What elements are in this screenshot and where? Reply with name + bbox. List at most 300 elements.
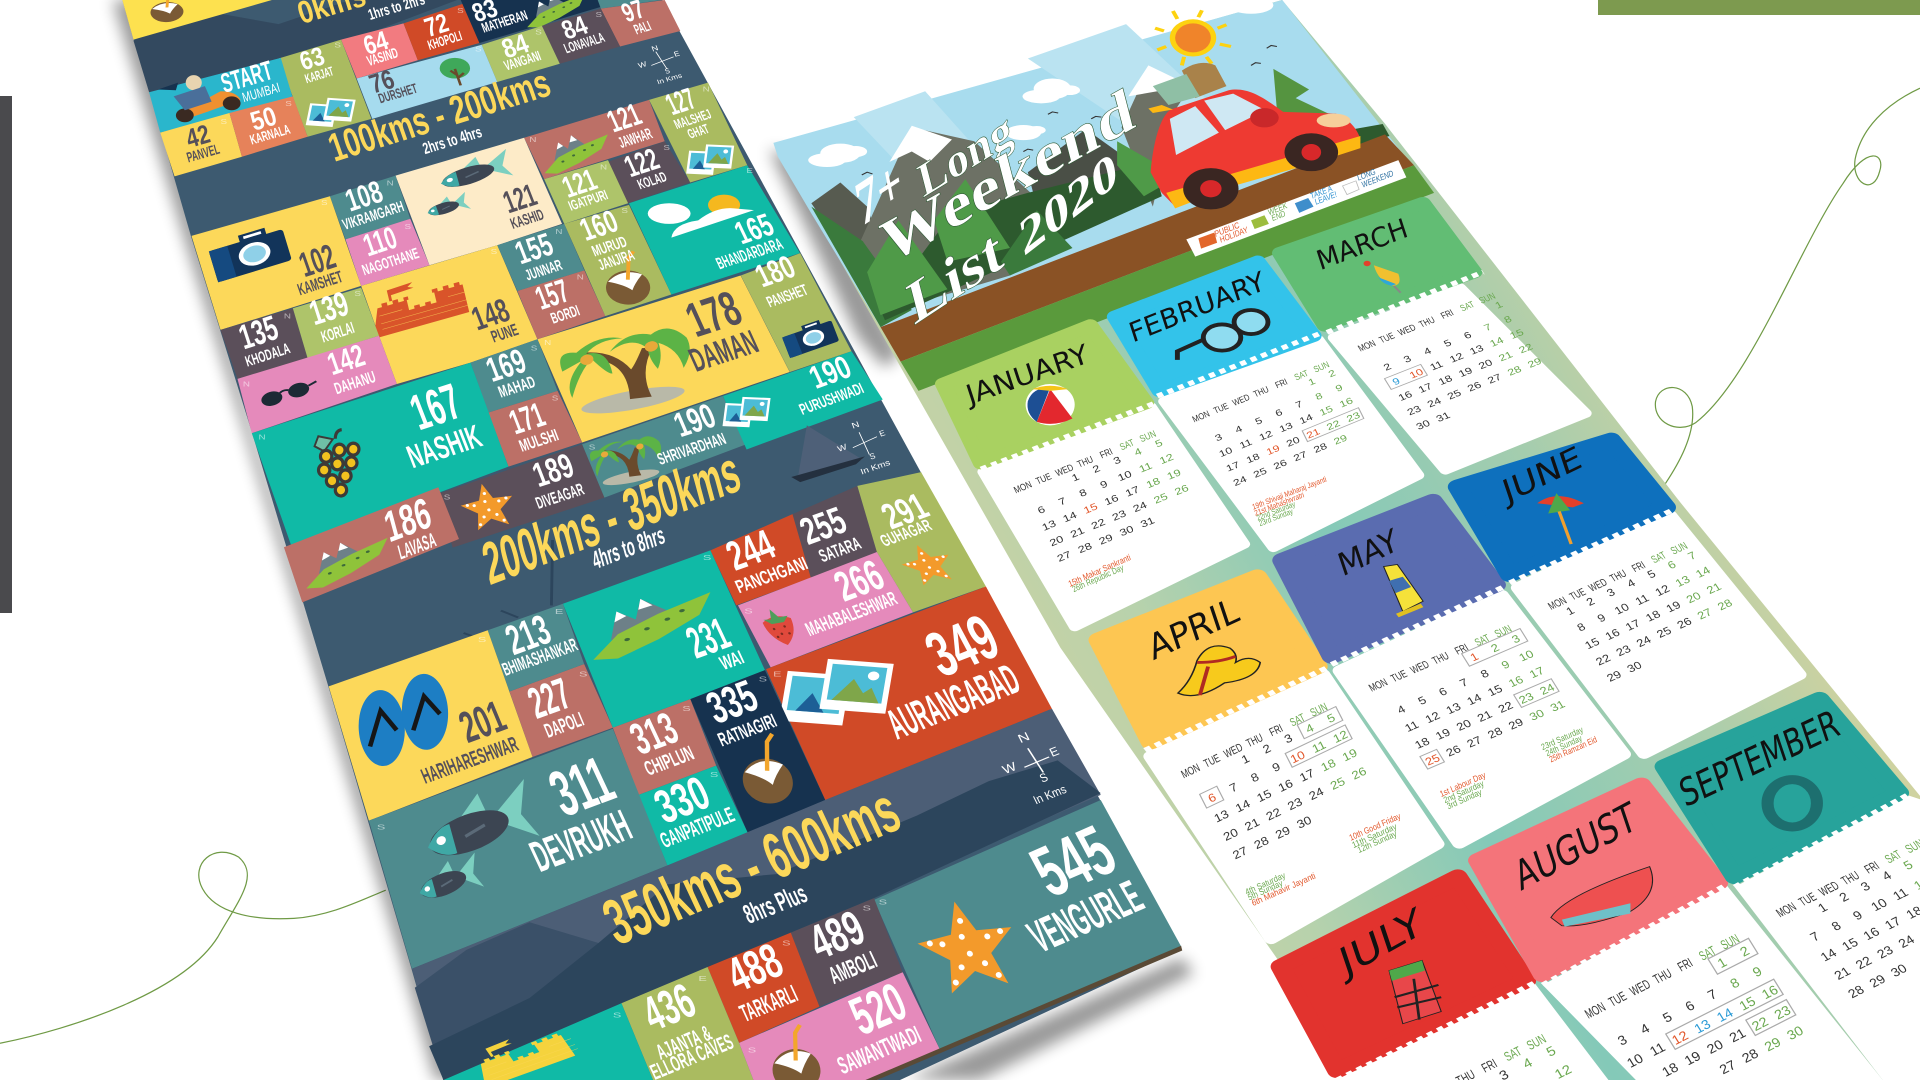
direction letters: upper cells: N bbox=[387, 178, 394, 187]
card: August: WED bbox=[1628, 978, 1653, 999]
direction letters: upper cells: N bbox=[284, 312, 291, 320]
card: June: 8 bbox=[1575, 621, 1588, 634]
heading: 200-350 kms: 200kms - 350kms bbox=[476, 437, 747, 598]
card: April: 6 bbox=[1206, 791, 1218, 805]
cell: 488 Tarkarli bbox=[708, 933, 819, 1043]
card: April: 15 bbox=[1255, 787, 1274, 805]
decorative curve left bbox=[0, 852, 386, 1043]
sheet background bbox=[774, 0, 1920, 1080]
card: August: 23 bbox=[1772, 1003, 1794, 1022]
forest bbox=[811, 69, 1389, 327]
card: February: SAT bbox=[1292, 367, 1310, 382]
card: September: 30 bbox=[1888, 961, 1910, 980]
cell: 349 Aurangabad bbox=[766, 586, 1052, 800]
direction letters: lower cells: S bbox=[682, 705, 691, 713]
cell: 545 Vengurle: 545 bbox=[1017, 810, 1129, 912]
card: June: 15 bbox=[1583, 636, 1603, 652]
legend: WEEKEND bbox=[1361, 169, 1395, 190]
grass bbox=[901, 165, 1434, 391]
heading: 350-600 kms bbox=[592, 773, 910, 958]
direction letters: lower cells: S bbox=[703, 554, 711, 562]
direction letters: upper cells: N bbox=[243, 380, 250, 388]
cell: 201 Harihareshwar bbox=[329, 630, 532, 821]
card: April: 4th Saturday bbox=[1244, 870, 1287, 897]
card: June: 22 bbox=[1594, 652, 1613, 668]
lower section cells: PANCHGANI bbox=[732, 553, 811, 597]
direction letters: upper cells: S bbox=[535, 28, 542, 36]
card: April: 20 bbox=[1221, 826, 1240, 844]
band: 350-600 kms mountains bbox=[412, 709, 1101, 1080]
mountains bbox=[811, 65, 1189, 310]
cell: 63 Karjat: KARJAT bbox=[303, 64, 336, 87]
card: July: JULY bbox=[1332, 899, 1429, 987]
cell: 244 Panchgani: 244 bbox=[719, 521, 782, 580]
card: September: 2 bbox=[1836, 889, 1852, 904]
card: January: 11 bbox=[1138, 461, 1154, 475]
card: May: 2 bbox=[1488, 641, 1502, 655]
card: August: 28 bbox=[1739, 1046, 1761, 1066]
legend: END bbox=[1271, 209, 1286, 224]
card: January: TUE bbox=[1034, 471, 1053, 487]
cell: 167 Nashik: NASHIK bbox=[402, 417, 487, 475]
label: 186 Lavasa bbox=[379, 489, 438, 564]
card: August: 14 bbox=[1714, 1005, 1736, 1025]
cell: 165 Bhandardara bbox=[629, 165, 800, 294]
card: June: THU bbox=[1608, 568, 1629, 585]
cell: 84 Vangani: VANGANI bbox=[502, 49, 543, 74]
cell: 190 Purushwadi bbox=[723, 349, 883, 449]
card: August: 1 bbox=[1715, 955, 1730, 971]
card: May: 21 bbox=[1475, 708, 1495, 724]
card: January: 2 bbox=[1091, 464, 1102, 475]
card: March: 5 bbox=[1442, 338, 1454, 349]
card: February: 21 bbox=[1305, 427, 1322, 441]
card: April: 2 bbox=[1261, 742, 1273, 756]
direction letters: upper cells: N bbox=[729, 394, 736, 403]
card: February: 28 bbox=[1312, 441, 1329, 455]
card: April: 16 bbox=[1276, 777, 1295, 795]
card: February: 2 bbox=[1327, 368, 1338, 380]
card: September: 17 bbox=[1882, 914, 1904, 932]
sky bbox=[773, 0, 1412, 327]
cell: 110 Nagothane: 110 bbox=[358, 219, 401, 263]
direction letters: lower cells: E bbox=[698, 975, 707, 983]
lower section cells: TARKARLI bbox=[736, 980, 802, 1028]
card: May: WED bbox=[1408, 659, 1432, 677]
card: June: SAT bbox=[1649, 550, 1669, 566]
direction letters: upper cells: S bbox=[663, 143, 670, 152]
card: September: 16 bbox=[1860, 924, 1882, 943]
cell: 157 Bordi: BORDI bbox=[548, 302, 582, 327]
cell: 121 Igatpuri: IGATPURI bbox=[566, 187, 610, 214]
card: February: MON bbox=[1190, 408, 1211, 424]
cell: 189 Diveagar: DIVEAGAR bbox=[533, 480, 587, 513]
card: March: 22 bbox=[1517, 342, 1535, 356]
cell: 171 Mulshi: MULSHI bbox=[516, 426, 561, 456]
cell: 178 Daman: 178 bbox=[677, 280, 749, 347]
direction letters: upper cells: S bbox=[444, 492, 450, 501]
card: March: 12 bbox=[1448, 351, 1466, 365]
cell: 311 Devrukh: 311 bbox=[538, 742, 625, 830]
card: September: FRI bbox=[1862, 859, 1882, 877]
card: June: 28 bbox=[1715, 597, 1735, 613]
card: April: 1 bbox=[1239, 752, 1252, 767]
card: June: 30 bbox=[1625, 659, 1645, 675]
direction letters: lower cells: E bbox=[773, 671, 781, 679]
card: April: 10th Good Friday bbox=[1348, 811, 1403, 843]
cell: 169 Mahad: 169 bbox=[481, 342, 531, 390]
icon: glasses bbox=[1177, 310, 1268, 360]
card: May: 14 bbox=[1464, 691, 1485, 708]
February notes: 23rd Sunday bbox=[1258, 507, 1294, 528]
cell: 313 Chiplun bbox=[613, 699, 716, 795]
card: September: 24 bbox=[1895, 932, 1917, 951]
compass: middle: E bbox=[878, 428, 887, 438]
cell: bottom teal with fort bbox=[444, 1003, 653, 1080]
cell: 489 Amboli: 489 bbox=[801, 900, 873, 970]
card: August: 18 bbox=[1659, 1060, 1681, 1080]
card: January: 10 bbox=[1116, 469, 1134, 484]
cell: 160 Murud Janjira: 160 bbox=[574, 203, 623, 248]
direction letters: upper cells: S bbox=[285, 99, 292, 108]
card: May: 16 bbox=[1506, 673, 1526, 690]
card: April: 29 bbox=[1273, 824, 1293, 842]
card: January: 8 bbox=[1078, 488, 1089, 499]
card: January: 24 bbox=[1131, 500, 1149, 515]
icon: hat bbox=[1178, 646, 1260, 696]
card: February: 5 bbox=[1254, 416, 1264, 427]
cell: top yellow with coconut bbox=[122, 0, 272, 40]
cell: 108 Vikramgarh: 108 bbox=[341, 173, 387, 218]
card: March: 8 bbox=[1502, 314, 1514, 326]
cell: 102 Kamshet: 102 bbox=[294, 236, 341, 285]
card: June: 13 bbox=[1673, 573, 1693, 589]
card: January bbox=[943, 325, 1244, 627]
card: May: 20 bbox=[1454, 717, 1474, 733]
compass: lower bbox=[1000, 730, 1069, 807]
cell: 97 Pali: PALI bbox=[631, 18, 654, 38]
card: February: 18 bbox=[1245, 452, 1262, 466]
cell: 488 Tarkarli: 488 bbox=[719, 933, 791, 1003]
cell: 330 Ganpatipule bbox=[639, 766, 748, 865]
card: June: 24 bbox=[1634, 634, 1654, 650]
card: July: 4 bbox=[1520, 1054, 1535, 1071]
cell: 231 Wai: WAI bbox=[716, 646, 747, 674]
compass: middle: N bbox=[850, 420, 861, 430]
card: April: 22 bbox=[1264, 805, 1283, 823]
cell: 127 Malshej Ghat: 127 bbox=[660, 82, 701, 122]
card: March bbox=[1280, 203, 1586, 470]
card: June: 14 bbox=[1694, 564, 1713, 580]
cell: 127 Malshej Ghat: GHAT bbox=[685, 122, 712, 142]
card: January: 4 bbox=[1133, 447, 1144, 458]
card: May: MON bbox=[1367, 677, 1390, 695]
card: April: WED bbox=[1222, 742, 1245, 761]
card: April: 5 bbox=[1325, 711, 1337, 726]
card: January: 9 bbox=[1099, 479, 1110, 491]
card: February: SUN bbox=[1311, 359, 1331, 375]
card: March: 13 bbox=[1468, 343, 1486, 357]
cell: 64 Vasind: 64 bbox=[359, 25, 393, 61]
card: January: 20 bbox=[1048, 534, 1066, 549]
card: August: 19 bbox=[1682, 1049, 1703, 1068]
card: August: 13 bbox=[1692, 1017, 1714, 1036]
card: June: 21 bbox=[1704, 581, 1724, 597]
card: March: 11 bbox=[1428, 359, 1445, 373]
card: March: 27 bbox=[1486, 372, 1504, 386]
cell: 135 Khodala bbox=[221, 308, 308, 379]
card: February: 23 bbox=[1345, 410, 1362, 424]
cell: 227 Dapoli bbox=[510, 664, 613, 757]
sky rays bbox=[854, 91, 1010, 207]
cell: 84 Lonavala: LONAVALA bbox=[562, 30, 607, 57]
card: May: 8 bbox=[1478, 667, 1492, 681]
lower section cells: BHIMASHANKAR bbox=[499, 635, 581, 680]
card: June bbox=[1458, 439, 1799, 753]
card: March: 9 bbox=[1391, 376, 1402, 388]
cell: 121 Igatpuri: 121 bbox=[557, 163, 602, 205]
icon: umbrella bbox=[1537, 493, 1584, 544]
card: January: 31 bbox=[1139, 516, 1157, 530]
card: August: 7 bbox=[1705, 987, 1720, 1003]
direction letters: upper cells: S bbox=[621, 206, 628, 215]
direction letters: upper cells: S bbox=[221, 117, 227, 126]
lower section cells: DEVRUKH bbox=[523, 801, 639, 881]
card: September: 29 bbox=[1866, 972, 1888, 990]
card: May: TUE bbox=[1389, 668, 1410, 685]
card: June: 3 bbox=[1605, 586, 1618, 599]
card: June: 11 bbox=[1633, 592, 1652, 608]
card: January: 21 bbox=[1069, 526, 1086, 540]
cell: 63 Karjat bbox=[279, 40, 371, 137]
compass: lower: In Kms bbox=[1031, 783, 1069, 807]
cell: 50 Karnala bbox=[229, 96, 308, 157]
card: July bbox=[1280, 877, 1608, 1080]
cell: 180 Panshet: PANSHET bbox=[764, 281, 811, 311]
cell: 102 Kamshet: KAMSHET bbox=[295, 268, 345, 300]
cell: 311 Devrukh bbox=[369, 729, 667, 969]
direction letters: upper cells: S bbox=[404, 222, 411, 231]
compass: lower: N bbox=[1016, 730, 1032, 746]
card: March: 3 bbox=[1402, 354, 1414, 365]
card: April: 8 bbox=[1249, 770, 1261, 785]
card: February: 29 bbox=[1332, 433, 1349, 447]
right edge cells bbox=[723, 248, 892, 482]
heading: 100-200 kms: 2hrs to 4hrs bbox=[420, 122, 484, 158]
lower section cells: MAHABALESHWAR bbox=[802, 587, 901, 640]
card: May: 11 bbox=[1402, 718, 1422, 734]
card: September: 1 bbox=[1815, 900, 1830, 915]
cell: 157 Bordi bbox=[517, 270, 605, 339]
cell: 171 Mulshi: 171 bbox=[504, 396, 550, 442]
card: February: 16 bbox=[1338, 396, 1355, 410]
card: May: 31 bbox=[1548, 697, 1568, 714]
card: August: 22 bbox=[1749, 1014, 1771, 1034]
cell: 110 Nagothane: NAGOTHANE bbox=[360, 244, 421, 279]
compass: lower: E bbox=[1047, 744, 1061, 760]
direction letters: upper cells bbox=[221, 6, 753, 501]
sheet shadow bbox=[769, 149, 900, 367]
card: February: 19 bbox=[1265, 443, 1282, 458]
cell: 180 Panshet: 180 bbox=[749, 248, 801, 294]
heading: 200-350 kms: 4hrs to 8hrs bbox=[589, 522, 668, 575]
January notes: 26th Republic Day bbox=[1071, 563, 1126, 595]
card: February: 3 bbox=[1213, 432, 1224, 444]
road bbox=[881, 134, 1414, 362]
card: January: 7 bbox=[1057, 496, 1068, 508]
card: May: 3rd Sunday bbox=[1446, 787, 1484, 812]
card: May: 5 bbox=[1415, 694, 1429, 708]
card: August: 2 bbox=[1737, 943, 1752, 959]
card: February: 26 bbox=[1272, 458, 1289, 472]
compass: middle: W bbox=[836, 442, 848, 453]
cell: 108 Vikramgarh: VIKRAMGARH bbox=[340, 197, 406, 233]
card: February: 1 bbox=[1307, 376, 1317, 388]
lower section cells bbox=[284, 472, 1182, 1080]
luggage bbox=[1153, 63, 1226, 105]
card: March: THU bbox=[1417, 314, 1437, 329]
cell: 190 Purushwadi: PURUSHWADI bbox=[796, 380, 866, 418]
lower calendar cards bbox=[1067, 439, 1920, 1080]
upper section cells bbox=[122, 0, 800, 548]
card: February: 24 bbox=[1232, 474, 1249, 489]
card: February: 25 bbox=[1252, 466, 1269, 480]
card: February: FRI bbox=[1273, 376, 1289, 390]
card: January: 22 bbox=[1090, 517, 1107, 532]
card: August: AUGUST bbox=[1509, 792, 1642, 900]
cell: 313 Chiplun: 313 bbox=[622, 703, 685, 764]
card: September: 4 bbox=[1879, 868, 1894, 883]
card: May: 30 bbox=[1527, 706, 1547, 723]
cell: start Mumbai: MUMBAI bbox=[241, 81, 282, 106]
direction letters: upper cells: S bbox=[334, 41, 341, 49]
legend: LONG bbox=[1356, 167, 1377, 183]
card: January: 27 bbox=[1056, 550, 1073, 564]
cell: 135 Khodala: 135 bbox=[234, 308, 283, 357]
cell: 160 Murud Janjira: MURUD bbox=[589, 233, 630, 260]
card: April: 24 bbox=[1307, 785, 1326, 803]
card: February: 8 bbox=[1314, 391, 1325, 403]
cell: 102 Kamshet bbox=[192, 196, 361, 330]
card: April: 7 bbox=[1227, 780, 1240, 795]
card: April: SAT bbox=[1288, 712, 1308, 730]
card: March: 31 bbox=[1434, 410, 1452, 424]
card: August: SUN bbox=[1718, 932, 1742, 953]
card: May: MAY bbox=[1333, 522, 1403, 584]
cell: 108 Vikramgarh bbox=[330, 173, 410, 239]
cell: 186 Lavasa bbox=[284, 487, 459, 602]
cell: 127 Malshej Ghat: MALSHEJ bbox=[672, 107, 714, 132]
direction letters: upper cells: N bbox=[600, 163, 607, 171]
card: March: MARCH bbox=[1313, 213, 1412, 277]
card: January: FRI bbox=[1098, 446, 1114, 460]
cell: 190 Shrivardhan: SHRIVARDHAN bbox=[655, 430, 729, 469]
card: March: 4 bbox=[1422, 346, 1434, 357]
title: 2020 bbox=[1015, 140, 1121, 268]
icon: clouds and sun bbox=[648, 195, 754, 238]
cell: 84 Vangani: 84 bbox=[497, 28, 533, 64]
card: April: THU bbox=[1245, 732, 1265, 751]
cell: 72 Khopoli: KHOPOLI bbox=[426, 29, 464, 53]
card: May: 24th Sunday bbox=[1544, 733, 1584, 759]
cell: 50 Karnala: 50 bbox=[247, 101, 280, 137]
lower section cells: AURANGABAD bbox=[879, 656, 1028, 748]
card: May: SUN bbox=[1493, 623, 1515, 641]
icon: sailboat bbox=[791, 425, 865, 482]
direction letters: lower cells: S bbox=[748, 1047, 756, 1055]
card: April: 25 bbox=[1328, 775, 1347, 793]
card: April: 9 bbox=[1270, 760, 1283, 775]
card: September: 15 bbox=[1839, 935, 1861, 953]
card: August: MON bbox=[1583, 1001, 1608, 1022]
card: February: 20 bbox=[1285, 435, 1302, 449]
card: May: 4 bbox=[1395, 703, 1408, 717]
cell: 227 Dapoli: 227 bbox=[521, 668, 577, 728]
label: 186 Lavasa: LAVASA bbox=[396, 529, 438, 564]
cell: 84 Lonavala bbox=[542, 9, 620, 64]
cell: 121 Kashid: 121 bbox=[498, 177, 541, 220]
card: April: 6th Mahavir Jayanti bbox=[1250, 871, 1317, 908]
poster edge bbox=[865, 946, 1182, 1080]
cell: 255 Satara bbox=[792, 486, 877, 578]
card: May: 26 bbox=[1443, 742, 1464, 759]
heading: 200-350 kms bbox=[476, 437, 747, 598]
card: June: 17 bbox=[1623, 618, 1643, 633]
card: June: 18 bbox=[1644, 608, 1663, 624]
legend: TAKE A bbox=[1310, 184, 1334, 202]
card: June: MON bbox=[1546, 595, 1570, 613]
cell: 167 Nashik bbox=[252, 363, 508, 548]
card: March: SAT bbox=[1458, 298, 1477, 313]
card: January: 13 bbox=[1040, 519, 1058, 533]
card: February: 11 bbox=[1238, 437, 1254, 451]
lower section cells: 350kms - 600kms bbox=[592, 773, 910, 958]
card: April: 4 bbox=[1303, 721, 1316, 736]
card: June: TUE bbox=[1567, 586, 1589, 603]
cell: 76 Durshet: 76 bbox=[365, 64, 398, 99]
card: August: SAT bbox=[1697, 944, 1719, 964]
direction letters: upper cells: N bbox=[529, 135, 537, 144]
card: January: THU bbox=[1075, 454, 1095, 470]
cell: 121 Jawhar: 121 bbox=[602, 97, 647, 139]
card: March: 28 bbox=[1506, 364, 1524, 378]
card: May: 29 bbox=[1506, 715, 1526, 732]
compass: upper: In Kms bbox=[656, 71, 683, 86]
card: March: 23 bbox=[1405, 404, 1423, 418]
cell: 165 Bhandardara: BHANDARDARA bbox=[713, 235, 786, 273]
left dark side bar bbox=[0, 96, 12, 613]
direction letters: upper cells: S bbox=[475, 45, 482, 53]
card: August: 27 bbox=[1717, 1058, 1739, 1077]
card: February: THU bbox=[1251, 384, 1271, 399]
cell: 72 Khopoli bbox=[404, 3, 479, 60]
card: January: 18 bbox=[1145, 476, 1162, 491]
text crossing panels bbox=[379, 437, 747, 598]
card: June: 19 bbox=[1664, 599, 1683, 615]
compass: upper: N bbox=[650, 43, 660, 53]
card: May: 17 bbox=[1527, 664, 1547, 681]
card: May: 10 bbox=[1516, 647, 1537, 664]
card: April: 28 bbox=[1252, 834, 1271, 852]
card: February: 14 bbox=[1298, 412, 1315, 427]
icon: cocktail bbox=[1364, 261, 1401, 293]
legend: LEAVE! bbox=[1314, 190, 1338, 207]
title: Long bbox=[913, 102, 1017, 208]
compass: upper: E bbox=[672, 49, 681, 58]
card: January: 23 bbox=[1111, 509, 1128, 523]
cell: 190 Shrivardhan: 190 bbox=[668, 397, 721, 445]
card: August: 29 bbox=[1762, 1035, 1784, 1054]
